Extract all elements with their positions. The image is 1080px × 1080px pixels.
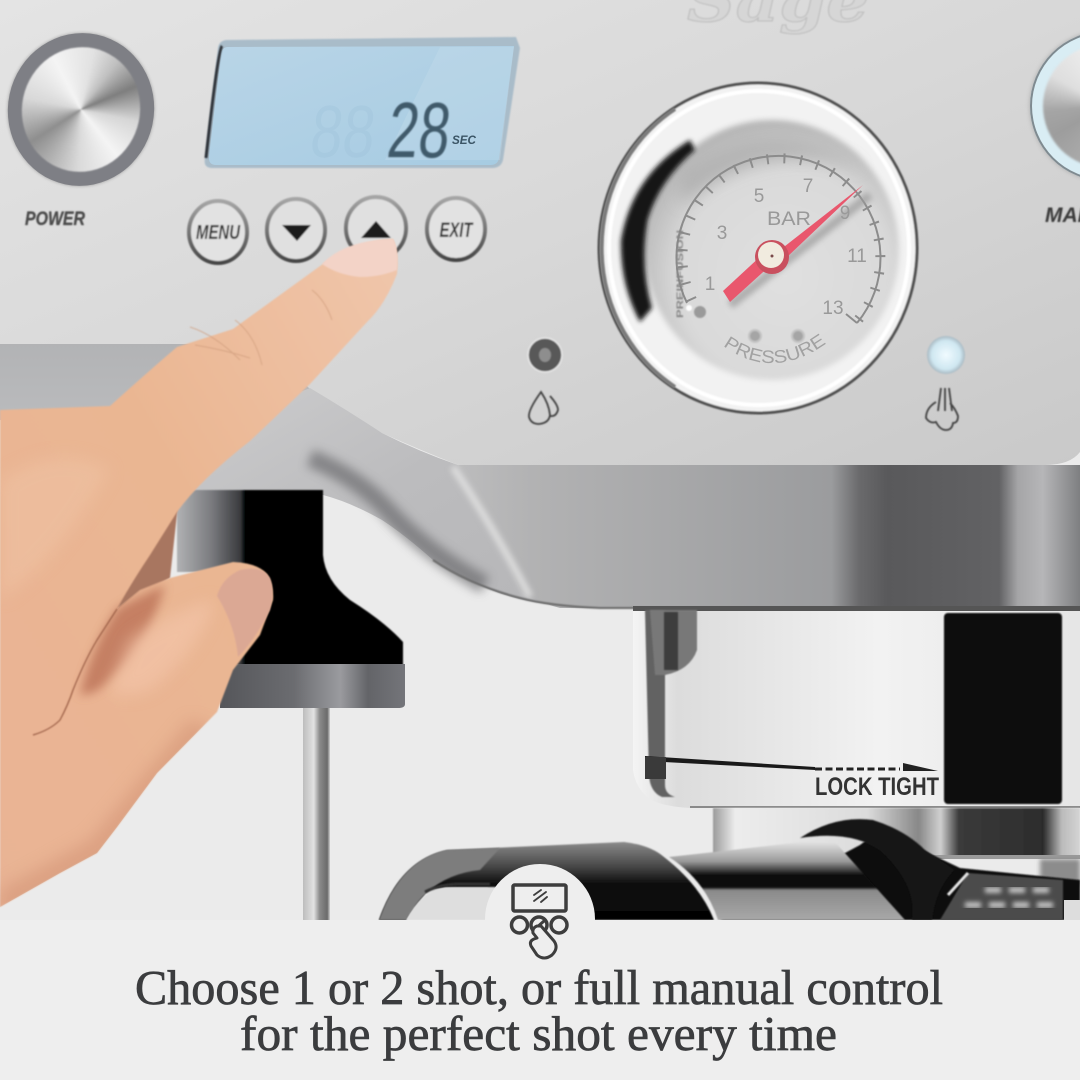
LCD glare [385, 47, 514, 160]
icon: steam [926, 388, 958, 430]
arch inner dark line [425, 884, 490, 892]
gauge numbers [705, 176, 867, 319]
right lower light [1064, 900, 1080, 920]
caption text: Choose 1 or 2 shot, or full manual control [135, 960, 943, 1015]
button: up arrow [346, 197, 406, 259]
tamper [177, 490, 405, 920]
basket highlights [965, 890, 1060, 905]
hand interior shading [0, 457, 215, 925]
icon: water drops [529, 392, 558, 424]
gauge outer rim [599, 83, 917, 413]
power label: POWER [25, 209, 85, 230]
basket [940, 873, 1063, 920]
LCD soft frame [205, 37, 520, 168]
lock line [645, 756, 815, 770]
gauge numbers: 1 [705, 274, 715, 295]
thumb highlight [108, 607, 207, 693]
thumb web reddish shading [80, 585, 165, 695]
palm shading [9, 466, 94, 577]
dial screws [749, 330, 804, 342]
button: menu [189, 201, 247, 263]
right indicator light [927, 336, 965, 374]
black handle arch [379, 842, 714, 920]
chrome bright streak [453, 467, 530, 597]
fingernail: index [322, 239, 398, 277]
gauge numbers: 9 [840, 203, 850, 224]
hand [0, 239, 398, 925]
manual dial brushed face [1043, 44, 1080, 168]
LCD left edge [206, 46, 222, 158]
tamper stem [303, 705, 330, 920]
knuckle creases [190, 290, 332, 365]
power knob brushed face [10, 36, 152, 183]
gauge numbers: 13 [822, 298, 844, 319]
lock arrow [903, 763, 938, 771]
tamper base [220, 664, 405, 708]
swoop shadow [310, 458, 485, 585]
black body behind handle [720, 830, 1080, 920]
thumbnail [217, 569, 272, 657]
machine front panel [0, 0, 1080, 465]
power knob outer ring [0, 19, 168, 200]
group collar [713, 808, 1080, 858]
cylinder side strip [645, 610, 675, 797]
tamper grip [177, 490, 403, 668]
arch inner light [406, 887, 500, 920]
left indicator light [528, 338, 562, 372]
caption text [135, 960, 943, 1061]
lock small square [645, 757, 666, 779]
preinfusion label: PREINFUSION [675, 230, 685, 318]
needle shadow [730, 195, 870, 305]
preinfusion dot [686, 305, 706, 318]
right end block [1040, 859, 1080, 885]
lock dashes [815, 768, 900, 770]
LCD screen [209, 46, 514, 165]
collar base light strip [927, 855, 1080, 859]
web shadow between finger and thumb [110, 505, 178, 615]
gauge dial [645, 120, 899, 380]
ghost digits: 88 [307, 90, 380, 173]
bottom caption panel [0, 920, 1080, 1080]
button: exit [427, 198, 485, 260]
timer reading: 28 [384, 86, 455, 174]
lower swooping body [180, 388, 560, 606]
black locking bar [944, 613, 1062, 804]
chrome edge line [433, 560, 1080, 608]
pressure gauge [596, 80, 920, 416]
caption text: for the perfect shot every time [240, 1006, 837, 1061]
LCD display [205, 37, 520, 174]
lower palm shading [0, 722, 206, 907]
lock tight label: LOCK TIGHT [815, 773, 939, 801]
seconds unit: SEC [452, 133, 476, 147]
arch left limb [379, 848, 500, 920]
gauge needle [723, 185, 863, 302]
dial upper shading [680, 139, 865, 205]
button: down arrow [267, 199, 325, 261]
gauge dark reflection [621, 140, 695, 322]
thumb crease line [33, 609, 117, 735]
LCD top edge [226, 42, 516, 46]
group head cylinder [633, 606, 1080, 808]
gauge inner highlight [609, 91, 909, 405]
gauge chrome left edge [602, 109, 675, 387]
bright corner highlight [948, 873, 968, 895]
portafilter handle body [669, 842, 905, 920]
black ring around handle [800, 819, 954, 920]
manual dial outer ring [1030, 31, 1080, 181]
button: menu: MENU [196, 222, 240, 244]
gauge numbers: 7 [803, 176, 813, 197]
gauge numbers: 3 [717, 223, 727, 244]
icon tab semicircle [485, 864, 595, 974]
brushed chrome lower body [458, 465, 1080, 608]
cylinder knob [650, 610, 697, 675]
button: exit: EXIT [440, 219, 474, 242]
left shadow band of panel [0, 344, 320, 440]
icon: control panel with pressing hand [512, 885, 567, 958]
hand shape [0, 239, 398, 907]
cylinder bottom edge [690, 806, 1080, 808]
cylinder body [633, 610, 1080, 808]
gauge numbers: 11 [847, 246, 867, 267]
gauge numbers: 5 [754, 186, 764, 207]
knob highlight [664, 612, 678, 670]
top shadow of cylinder [633, 606, 1080, 611]
gauge numbers: BAR [767, 209, 811, 230]
gauge scale [676, 156, 880, 323]
pressure label: PRESSURE [724, 334, 826, 364]
